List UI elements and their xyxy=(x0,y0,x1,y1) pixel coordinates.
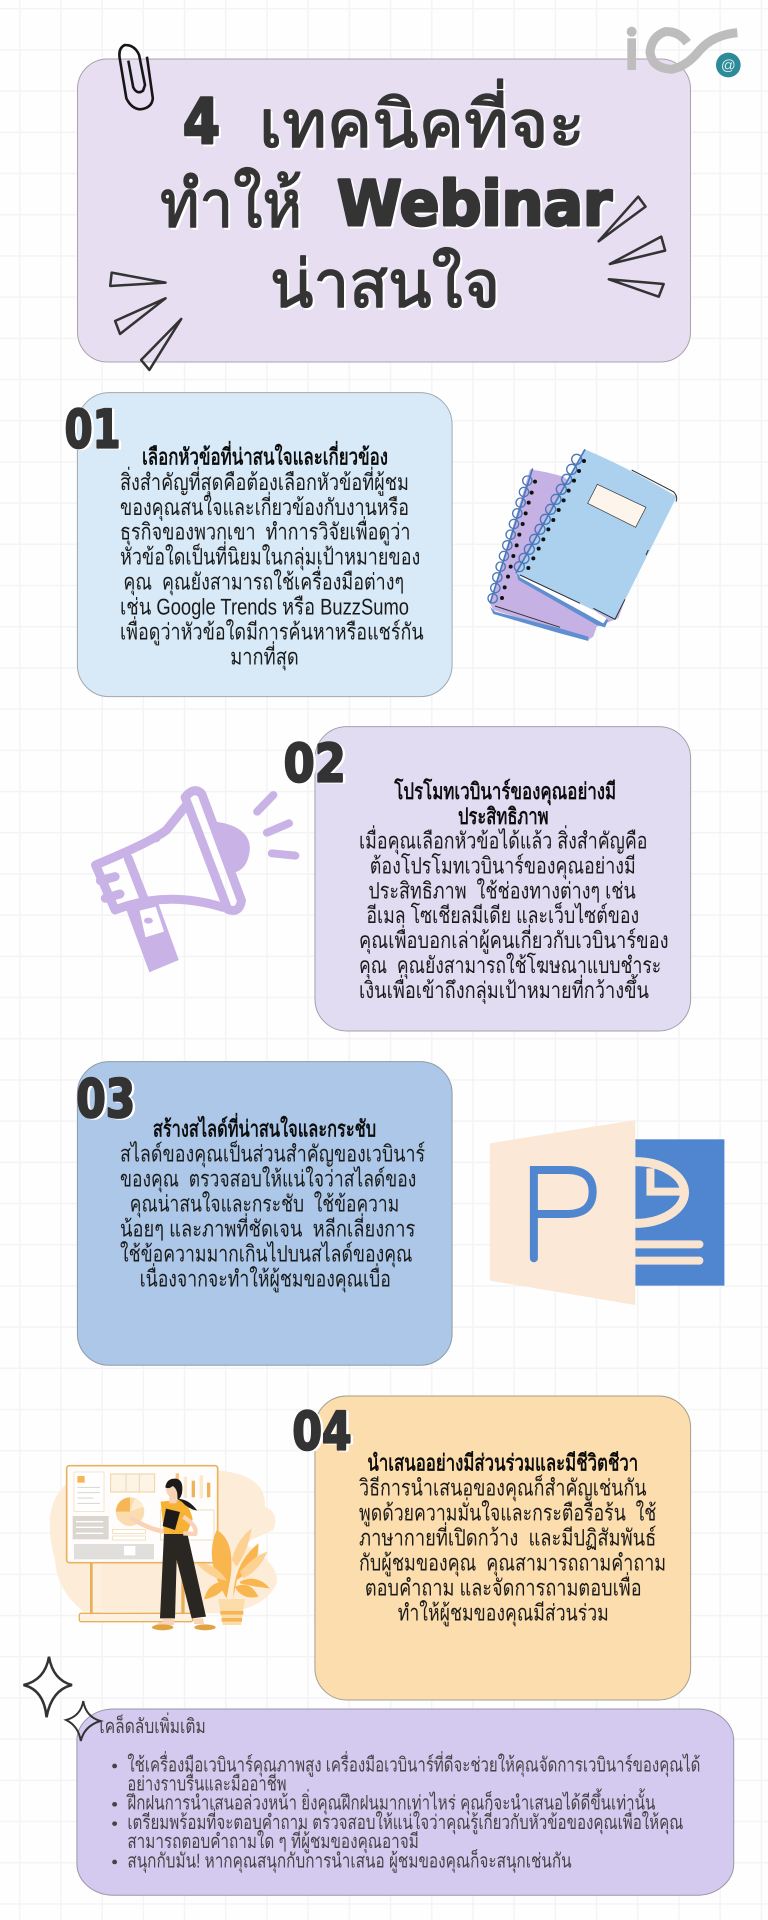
tips card xyxy=(77,1709,734,1895)
tips list: อย่างราบรื่นและมืออาชีพ xyxy=(127,1770,287,1795)
plant xyxy=(197,1528,270,1625)
decorative spikes: left of title xyxy=(110,273,181,370)
step 3 text: น้อยๆ และภาพที่ชัดเจน หลีกเลี่ยงการ xyxy=(120,1213,415,1241)
step 1 text: หัวข้อใดเป็นที่นิยมในกลุ่มเป้าหมายของ xyxy=(120,541,420,571)
step 3 number: 03 xyxy=(76,1068,135,1130)
title: 4 xyxy=(183,85,220,158)
icon: presenter at board with plant xyxy=(50,1466,277,1630)
icon: paperclip xyxy=(119,45,153,109)
icon: PowerPoint xyxy=(490,1120,724,1305)
icon: small sparkle xyxy=(66,1701,100,1741)
logo: ic@ xyxy=(627,27,741,77)
step 4 number: 04 xyxy=(292,1401,352,1462)
step 4 card xyxy=(315,1396,691,1700)
tips list xyxy=(112,1751,700,1873)
logo: ic@: @ xyxy=(721,57,736,73)
step 3 text: ของคุณ ตรวจสอบให้แน่ใจว่าสไลด์ของ xyxy=(120,1166,416,1192)
person xyxy=(132,1479,216,1630)
panel: step 4 xyxy=(292,1396,691,1700)
title: น่าสนใจ xyxy=(270,247,500,321)
step 4 text xyxy=(359,1450,666,1627)
title: ทำให้ xyxy=(160,167,302,241)
step 1 text: เช่น Google Trends หรือ BuzzSumo xyxy=(120,594,409,620)
panel: step 3 xyxy=(76,1062,452,1365)
tips heading: เคล็ดลับเพิ่มเติม xyxy=(99,1712,206,1737)
panel: title background xyxy=(78,59,690,362)
step 2 text xyxy=(359,778,669,1004)
panel: step 1 xyxy=(65,393,452,697)
step 1 text: เลือกหัวข้อที่น่าสนใจและเกี่ยวข้อง xyxy=(142,441,388,470)
step 1 text: ของคุณสนใจและเกี่ยวข้องกับงานหรือ xyxy=(120,492,409,521)
step 2 number: 02 xyxy=(284,733,346,794)
icon: large sparkle xyxy=(24,1657,72,1717)
step 3 text: คุณน่าสนใจและกระชับ ใช้ข้อความ xyxy=(130,1191,399,1217)
step 1 number: 01 xyxy=(65,399,120,460)
step 1 text: สิ่งสำคัญที่สุดคือต้องเลือกหัวข้อที่ผู้ชม xyxy=(120,467,409,496)
step 3 text: เนื่องจากจะทำให้ผู้ชมของคุณเบื่อ xyxy=(140,1263,391,1292)
step 2 card xyxy=(315,727,691,1031)
decorative spikes: right of title xyxy=(599,197,665,297)
step 1 text: มากที่สุด xyxy=(230,641,299,671)
step 1 text: เพื่อดูว่าหัวข้อใดมีการค้นหาหรือแชร์กัน xyxy=(120,616,424,646)
title: Webinar xyxy=(337,167,612,240)
step 3 text: ใช้ข้อความมากเกินไปบนสไลด์ของคุณ xyxy=(120,1241,412,1267)
step 3 text xyxy=(120,1113,425,1292)
title xyxy=(160,79,612,321)
icon: megaphone xyxy=(96,791,295,972)
step 1 text xyxy=(120,441,424,671)
step 3 text: สร้างสไลด์ที่น่าสนใจและกระชับ xyxy=(153,1113,376,1141)
panel: step 2 xyxy=(284,727,691,1031)
step 3 card xyxy=(77,1062,452,1365)
panel: additional tips xyxy=(77,1709,734,1895)
title: เทคนิคที่จะ xyxy=(259,79,585,161)
step 1 card xyxy=(77,393,452,697)
icon: notebooks xyxy=(488,449,677,641)
tips list: สามารถตอบคำถามใด ๆ ที่ผู้ชมของคุณอาจมี xyxy=(127,1827,419,1853)
step 2 text: ประสิทธิภาพ xyxy=(458,804,549,829)
step 1 text: ธุรกิจของพวกเขา ทำการวิจัยเพื่อดูว่า xyxy=(120,516,410,546)
step 3 text: สไลด์ของคุณเป็นส่วนสำคัญของเวบินาร์ xyxy=(120,1140,425,1167)
step 1 text: คุณ คุณยังสามารถใช้เครื่องมือต่างๆ xyxy=(123,566,404,596)
